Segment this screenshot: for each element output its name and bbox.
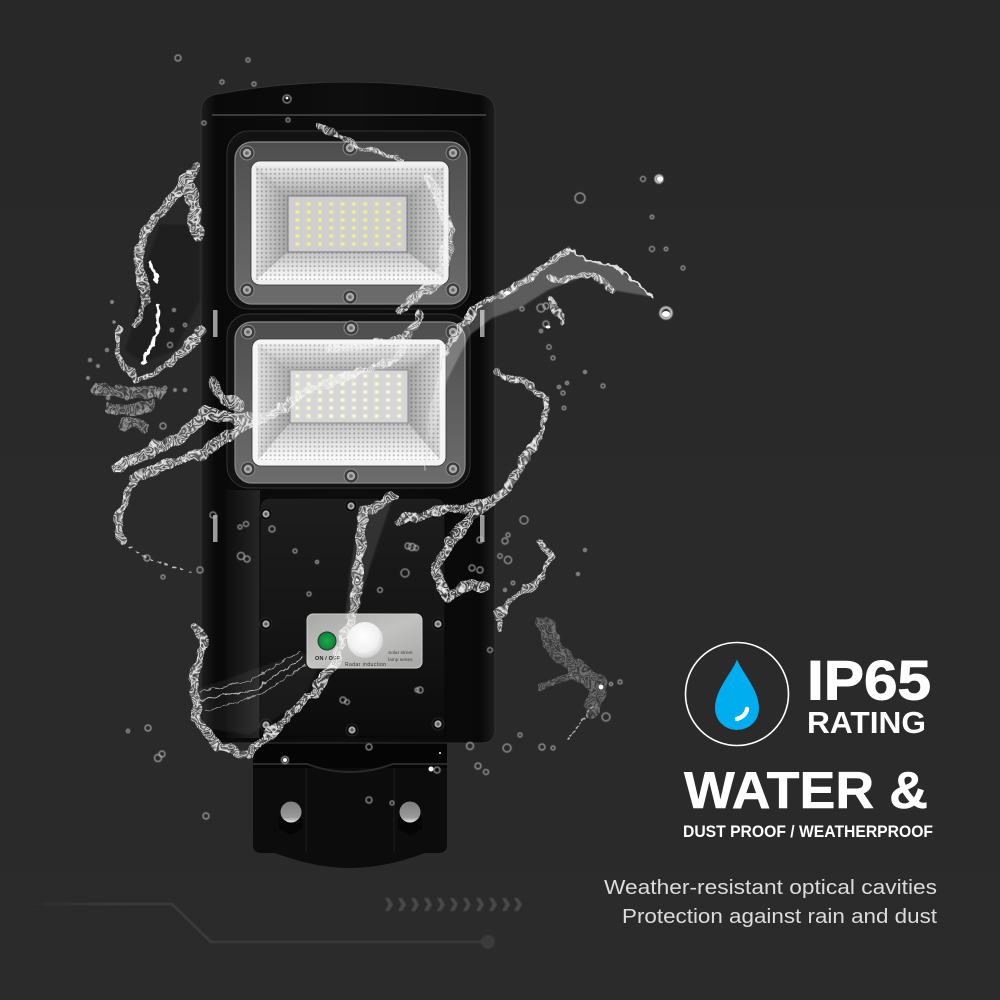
housing top ridge	[212, 114, 486, 116]
panel screws	[260, 500, 444, 736]
radar sensor dome	[347, 622, 383, 658]
right band edge	[443, 250, 567, 357]
on/off text: ON / OFF	[315, 656, 341, 662]
series text: Solar street	[388, 650, 413, 656]
water over lower module	[290, 315, 420, 400]
left spray cloud	[95, 388, 160, 428]
solar street lamp	[201, 82, 495, 868]
translucent water sheets	[125, 225, 653, 735]
left tail	[117, 483, 133, 543]
housing slots	[213, 310, 484, 542]
subheading: DUST PROOF / WEATHERPROOF	[683, 823, 933, 841]
water over upper module	[320, 125, 400, 160]
sensor label plate: lamp series	[388, 657, 413, 663]
upper LED module	[227, 131, 470, 309]
decorative circuit line	[17, 904, 495, 949]
lower housing shading	[226, 490, 260, 738]
body text	[604, 876, 937, 928]
bright droplets	[283, 97, 670, 772]
heading: IP65: IP65	[807, 648, 931, 712]
dim spray cloud	[545, 625, 600, 707]
droplets	[87, 55, 685, 819]
body text: Protection against rain and dust	[622, 905, 937, 928]
right lower strand	[495, 372, 547, 490]
heading: WATER &: WATER &	[684, 762, 928, 820]
icon: water drop badge	[686, 642, 788, 746]
middle band	[117, 413, 253, 467]
on/off button	[318, 632, 336, 650]
mounting bracket	[253, 743, 447, 868]
body text: Weather-resistant optical cavities	[604, 876, 937, 899]
water splash	[87, 55, 685, 819]
IP65 rating block	[604, 642, 937, 928]
left upper loop	[138, 167, 195, 300]
lamp housing	[201, 82, 495, 743]
radar text: Radar induction	[345, 662, 386, 668]
thin water strands	[123, 248, 653, 740]
sensor label plate	[307, 614, 422, 668]
right mid strand	[498, 542, 552, 628]
lower LED module	[227, 314, 470, 488]
heading: RATING: RATING	[807, 705, 926, 740]
battery panel	[260, 498, 445, 737]
bottom splash	[193, 620, 350, 755]
chevron row	[385, 898, 522, 911]
lacy water body	[95, 125, 612, 755]
